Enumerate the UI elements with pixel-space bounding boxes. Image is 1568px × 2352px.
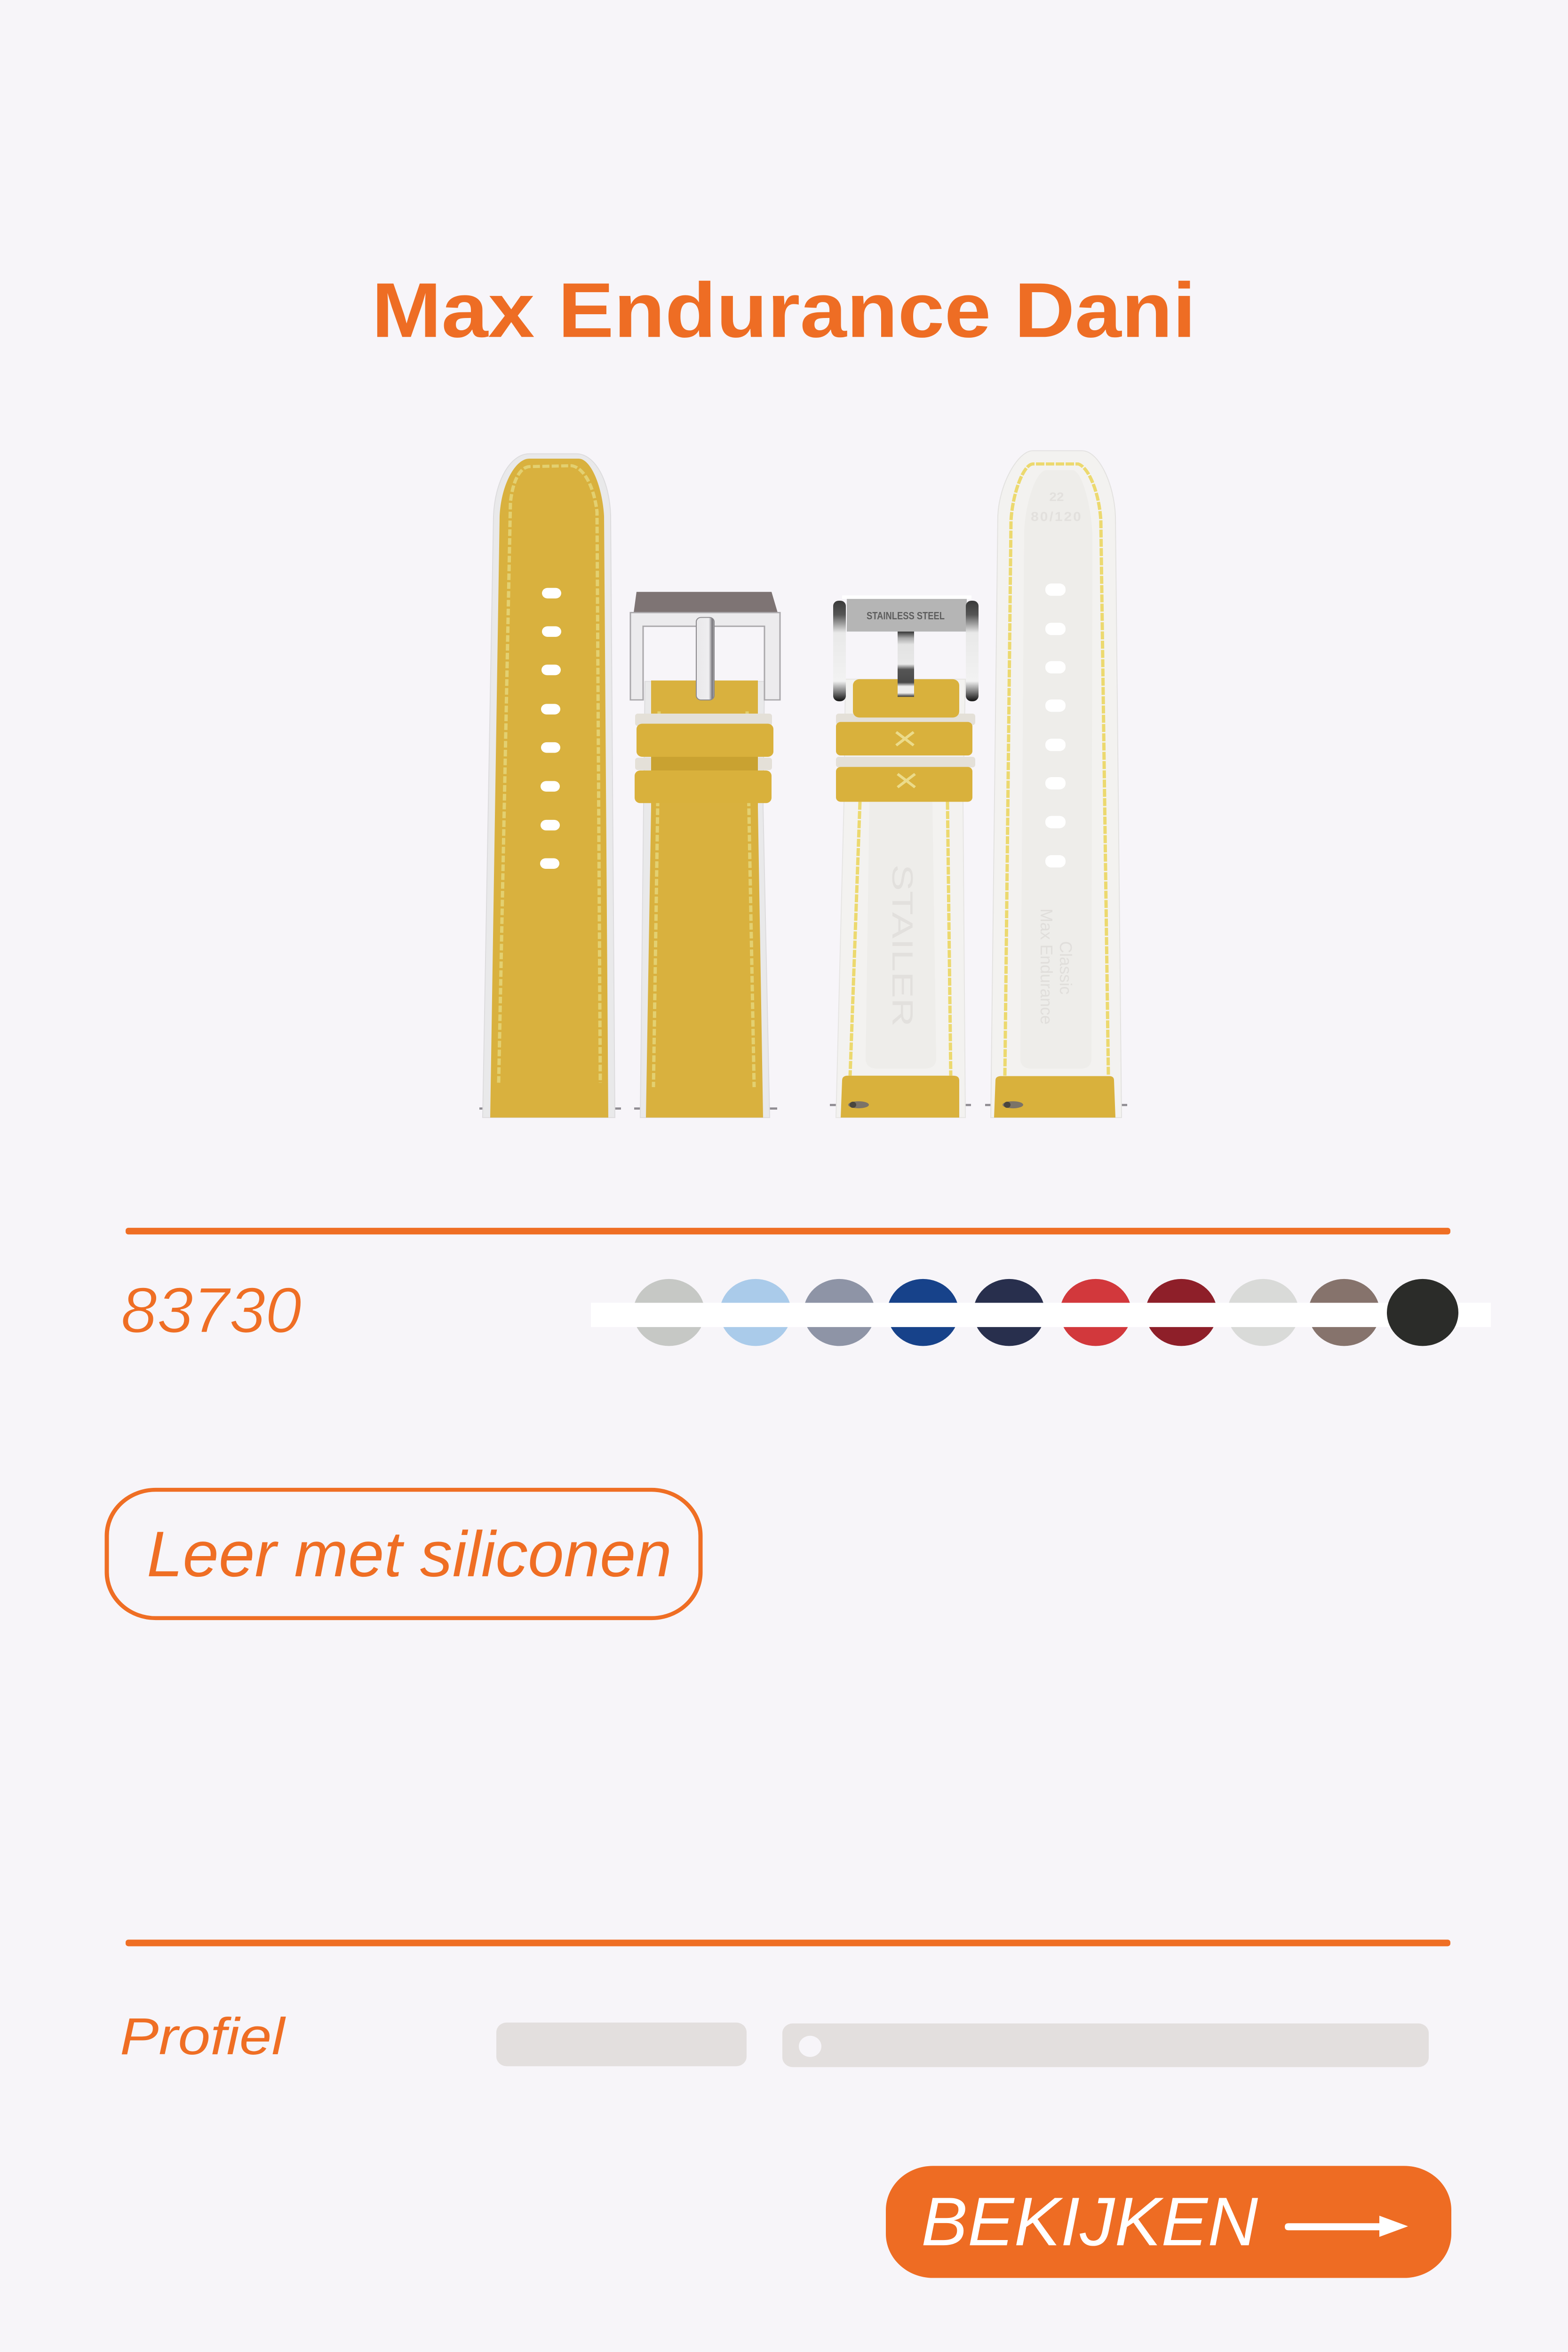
icon: arrow (1285, 2216, 1408, 2237)
strap piece 4: long white silicone back: Classic (1056, 941, 1075, 994)
profile label: Profiel (120, 2008, 286, 2066)
steel buckle (833, 596, 979, 701)
strap piece 1: long yellow leather front (479, 454, 621, 1118)
material tag: leather with silicone (107, 1490, 700, 1618)
product image: four watch strap pieces (479, 451, 1127, 1118)
profile bar: left segment (496, 2023, 747, 2066)
strap piece 3: white silicone back with steel buckle (830, 596, 979, 1118)
divider: upper orange rule (126, 1228, 1450, 1234)
material tag: leather with silicone: Leer met siliconen (147, 1518, 672, 1590)
view button: BEKIJKEN (921, 2184, 1258, 2260)
article number: 83730 (121, 1274, 302, 1346)
embossed size text: 22 (1049, 490, 1064, 504)
title: Max Endurance Dani (372, 267, 1196, 354)
embossed model text: Max Endurance (1037, 908, 1056, 1025)
view button (886, 2166, 1451, 2278)
strap piece 4: long white silicone back (985, 451, 1127, 1118)
strap piece 2: yellow leather with polished buckle (630, 592, 780, 1118)
steel buckle: STAINLESS STEEL (867, 610, 945, 621)
strap piece 4: long white silicone back: 80/120 (1031, 509, 1082, 524)
divider: lower orange rule (126, 1939, 1450, 1946)
colour swatches (591, 1279, 1491, 1346)
profile bar: right segment with marker (782, 2024, 1429, 2067)
embossed STAILER logo: STAILER (886, 865, 919, 1027)
